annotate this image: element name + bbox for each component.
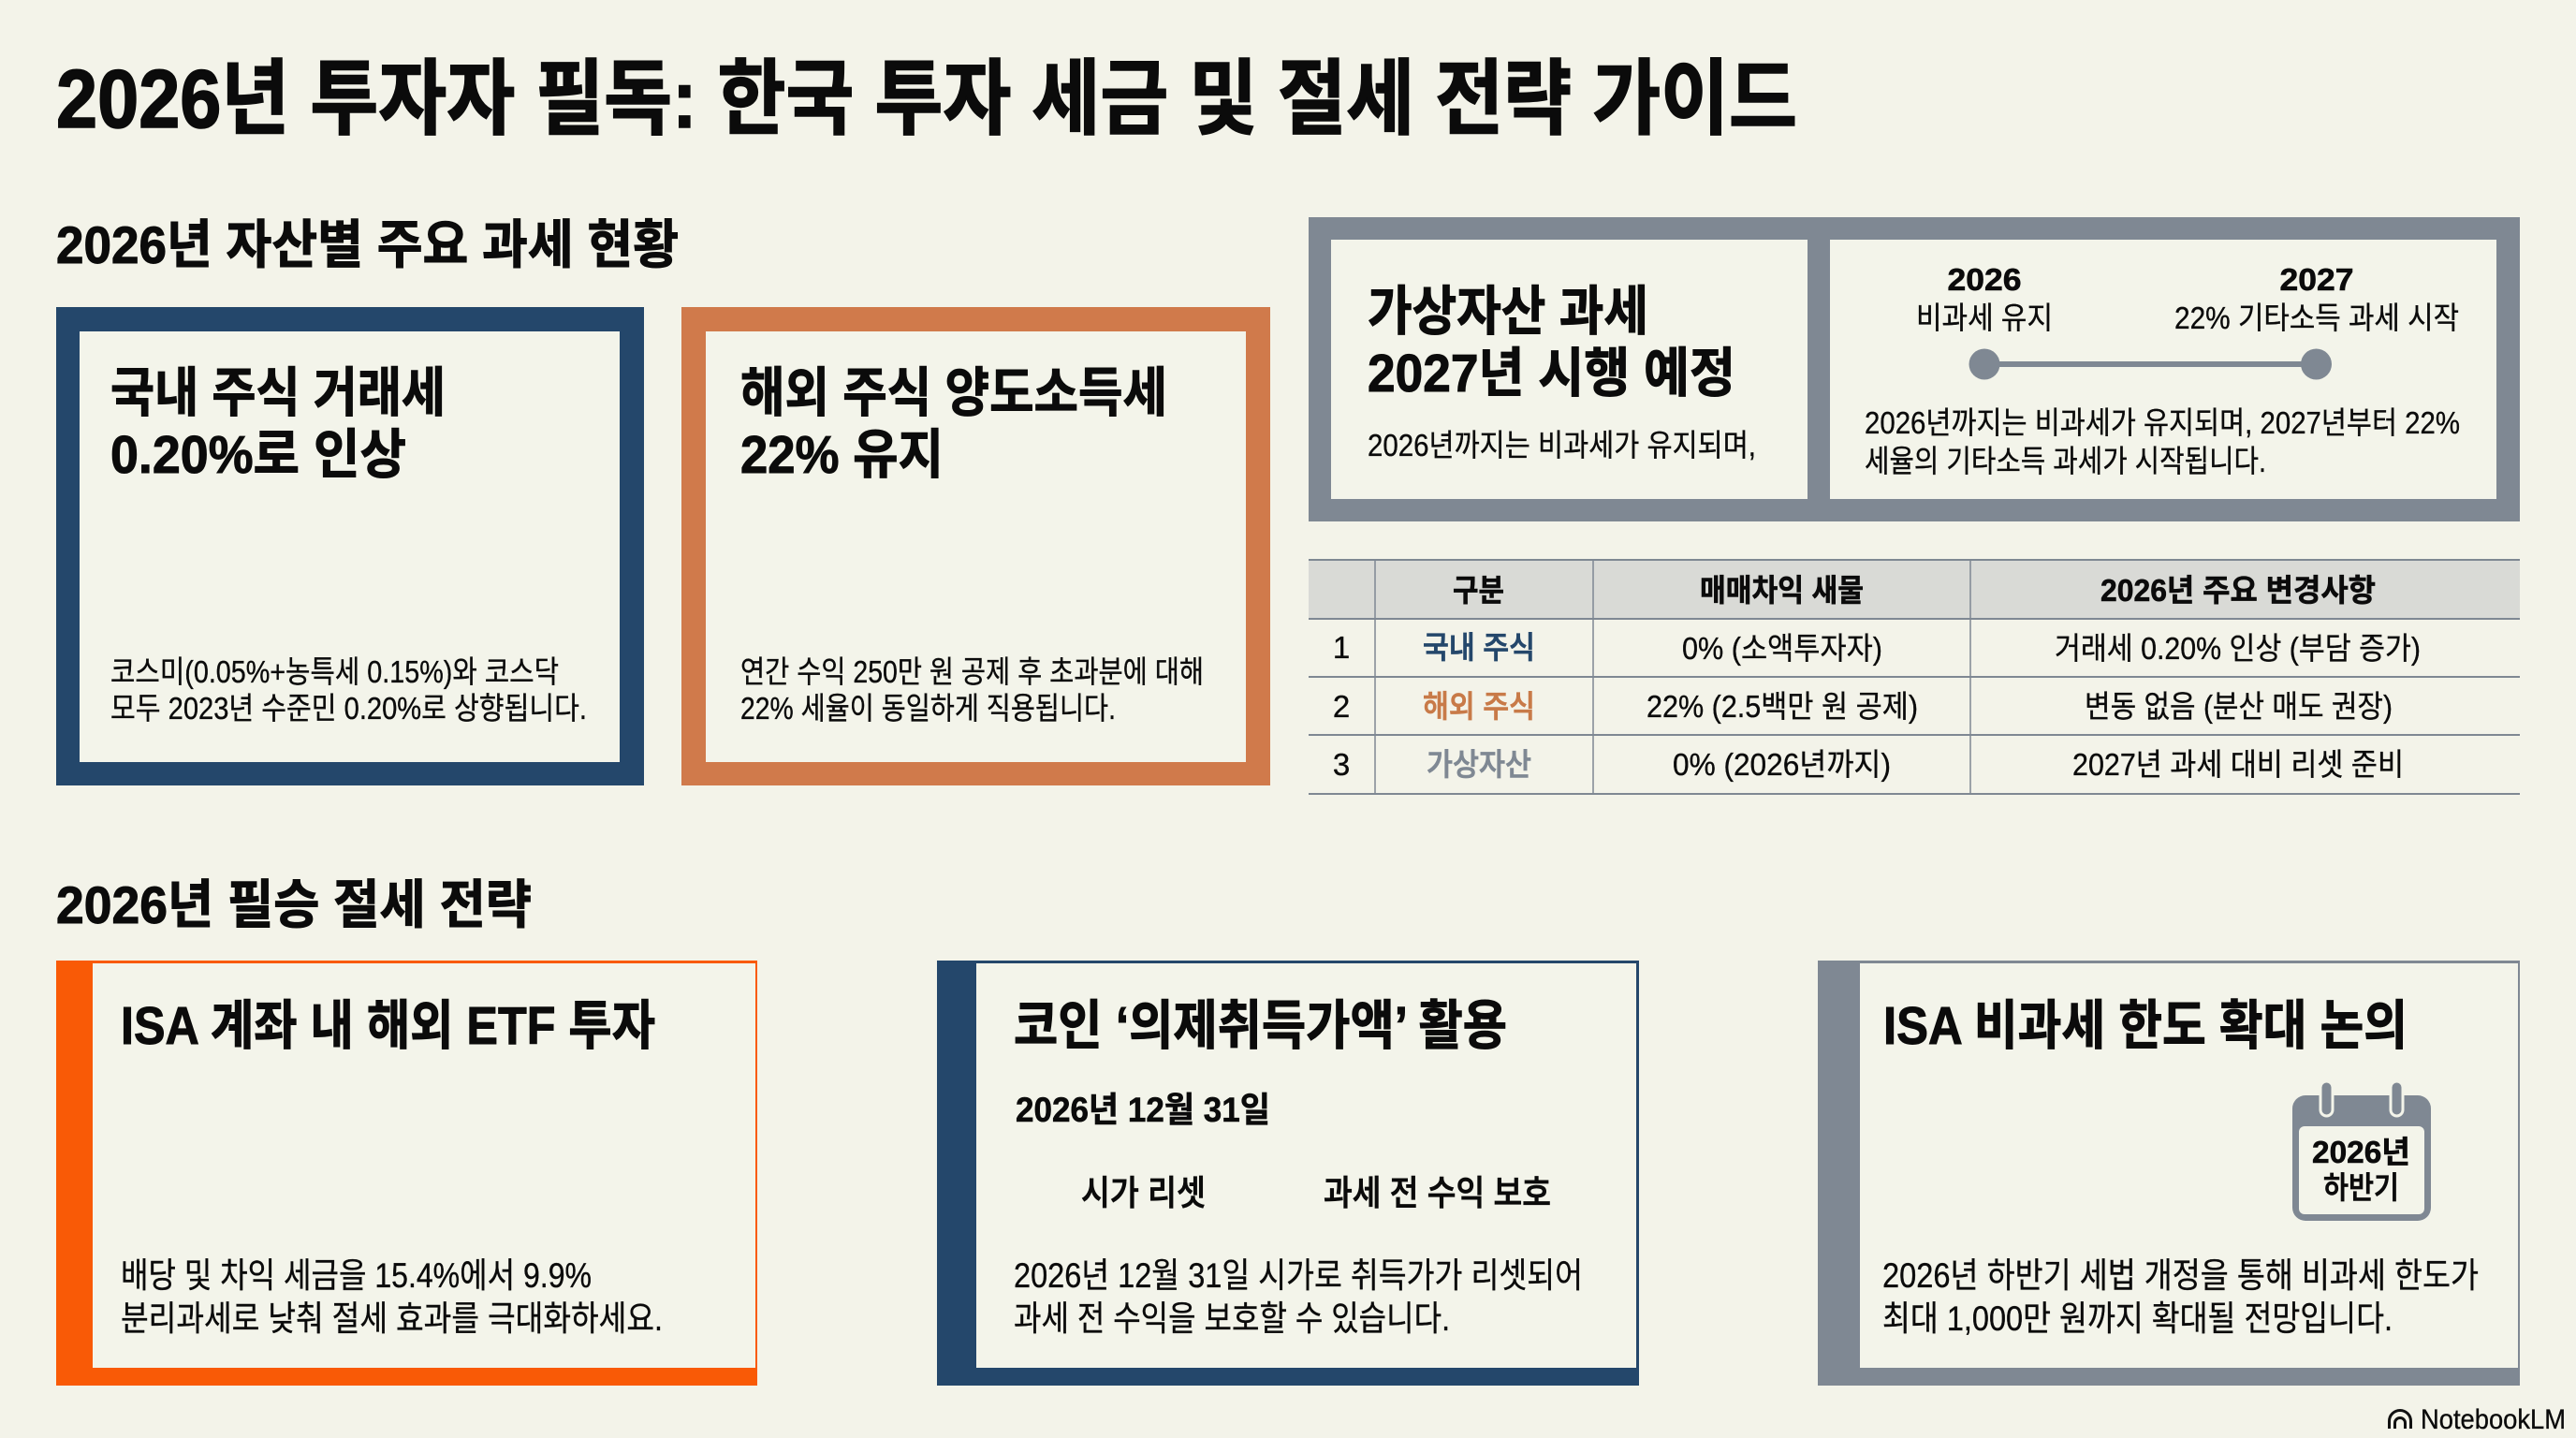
card body text: 코스미(0.05%+농특세 0.15%)와 코스닥 (110, 654, 559, 689)
card body text: 모두 2023년 수준민 0.20%로 상향됩니다. (110, 691, 587, 726)
panel: ISA tax-free limit expansion (1818, 961, 2520, 1386)
panel: domestic stock transaction tax (56, 307, 644, 785)
panel: coin deemed acquisition cost (937, 961, 1639, 1386)
table row: crypto assets: 3 (1333, 747, 1350, 782)
card body text (740, 654, 1204, 726)
card body text (110, 654, 587, 726)
table row: overseas stocks: 22% (2.5백만 원 공제) (1647, 689, 1918, 724)
card heading: 가상자산 과세 (1368, 282, 1648, 342)
timeline chart: 비과세 유지 (1916, 301, 2053, 335)
table row: crypto assets (1333, 747, 2404, 782)
timeline chart: 22% 기타소득 과세 시작 (2174, 301, 2459, 335)
icon: calendar (2292, 1081, 2431, 1221)
table header: 매매차익 새물 (1700, 573, 1864, 608)
table row: overseas stocks: 2 (1333, 689, 1350, 724)
table row: domestic stocks (1333, 630, 2421, 666)
panel: ISA overseas ETF (56, 961, 757, 1386)
card body text: 배당 및 차익 세금을 15.4%에서 9.9% (121, 1256, 592, 1295)
card heading: 0.20%로 인상 (110, 425, 406, 485)
table row: crypto assets: 0% (2026년까지) (1673, 747, 1891, 782)
panel: overseas stock capital gains tax (681, 307, 1270, 785)
table row: domestic stocks: 1 (1333, 630, 1350, 665)
card body text (1014, 1256, 1583, 1338)
heading: 2026 tax status by asset: 2026년 자산별 주요 과세 현황 (56, 215, 679, 274)
card heading: 국내 주식 거래세 (110, 363, 446, 423)
table header (1453, 573, 2376, 608)
card body text: 2026년까지는 비과세가 유지되며, (1368, 428, 1756, 462)
card body text: 최대 1,000만 원까지 확대될 전망입니다. (1882, 1299, 2393, 1338)
comparison table (1309, 560, 2520, 794)
date label: 2026년 12월 31일 (1016, 1091, 1270, 1129)
heading: 2026 tax saving strategies: 2026년 필승 절세 전략 (56, 875, 532, 934)
card heading: 2027년 시행 예정 (1368, 344, 1735, 404)
card body text (121, 1256, 663, 1338)
table row: domestic stocks: 거래세 0.20% 인상 (부담 증가) (2055, 631, 2421, 666)
card heading: 해외 주식 양도소득세 (740, 363, 1167, 423)
table row: overseas stocks: 해외 주식 (1423, 689, 1535, 724)
timeline body text: 2026년까지는 비과세가 유지되며, 2027년부터 22% (1865, 405, 2460, 440)
card body text: 연간 수익 250만 원 공제 후 초과분에 대해 (740, 654, 1204, 689)
table row: crypto assets: 가상자산 (1427, 747, 1531, 782)
title: 2026년 투자자 필독: 한국 투자 세금 및 절세 전략 가이드 (56, 52, 1797, 145)
icon: calendar: 하반기 (2323, 1170, 2399, 1205)
card heading (110, 363, 446, 485)
card body text: 분리과세로 낮춰 절세 효과를 극대화하세요. (121, 1299, 663, 1338)
table row: overseas stocks (1333, 689, 2393, 724)
card heading (1368, 282, 1735, 404)
table row: domestic stocks: 0% (소액투자자) (1682, 631, 1882, 666)
logo: NotebookLM: NotebookLM (2421, 1404, 2566, 1435)
card heading: ISA 비과세 한도 확대 논의 (1883, 996, 2408, 1056)
timeline body text: 세율의 기타소득 과세가 시작됩니다. (1865, 444, 2266, 478)
card heading: 22% 유지 (740, 425, 944, 485)
card body text: 과세 전 수익을 보호할 수 있습니다. (1014, 1299, 1450, 1338)
table row: domestic stocks: 국내 주식 (1423, 630, 1535, 665)
card body text: 2026년 하반기 세법 개정을 통해 비과세 한도가 (1882, 1256, 2479, 1295)
timeline body text (1865, 405, 2460, 478)
timeline chart: 2027 (2280, 262, 2353, 297)
card body text (1882, 1256, 2479, 1338)
card body text: 2026년 12월 31일 시가로 취득가가 리셋되어 (1014, 1256, 1583, 1295)
card heading (740, 363, 1167, 485)
table row: crypto assets: 2027년 과세 대비 리셋 준비 (2072, 747, 2404, 782)
table row: overseas stocks: 변동 없음 (분산 매도 권장) (2085, 689, 2393, 724)
timeline chart (1916, 262, 2459, 380)
table header: 2026년 주요 변경사항 (2100, 573, 2376, 608)
panel: crypto asset taxation (1309, 217, 2520, 521)
card body text: 22% 세율이 동일하게 직용됩니다. (740, 691, 1116, 726)
icon: calendar: 2026년 (2312, 1135, 2410, 1169)
timeline chart: 2026 (1947, 262, 2022, 297)
card heading: 코인 ‘의제취득가액’ 활용 (1014, 996, 1507, 1056)
card heading: ISA 계좌 내 해외 ETF 투자 (121, 996, 655, 1056)
key point: market price reset: 시가 리셋 (1081, 1174, 1206, 1212)
table header: 구분 (1453, 573, 1504, 608)
key point: pre-tax gain protection: 과세 전 수익 보호 (1324, 1174, 1551, 1212)
